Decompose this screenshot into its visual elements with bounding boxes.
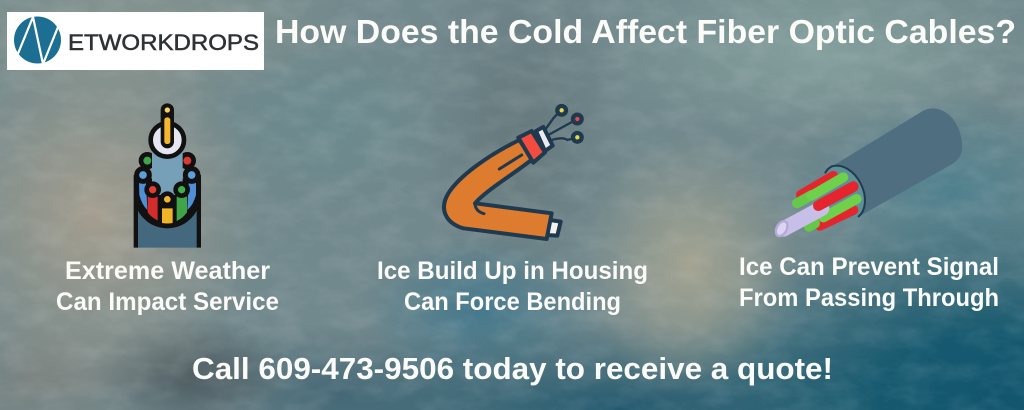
logo wordmark: ETWORKDROPS bbox=[68, 30, 259, 55]
label: extreme weather: Extreme Weather bbox=[65, 257, 270, 285]
icon: bent orange cable bbox=[444, 106, 582, 239]
label: extreme weather: Can Impact Service bbox=[56, 288, 279, 316]
title: How Does the Cold Affect Fiber Optic Cables? bbox=[275, 13, 1016, 50]
label: ice prevents signal: From Passing Through bbox=[739, 284, 999, 312]
call to action: Call 609-473-9506 today to receive a quote! bbox=[192, 351, 833, 386]
icon: open cable with fibers bbox=[773, 108, 962, 238]
logo mark bbox=[14, 16, 61, 64]
label: ice build up: Can Force Bending bbox=[404, 288, 621, 316]
label: ice build up bbox=[377, 257, 648, 316]
label: extreme weather bbox=[56, 257, 279, 316]
label: ice prevents signal: Ice Can Prevent Signal bbox=[739, 253, 999, 281]
logo: Networkdrops bbox=[7, 12, 264, 70]
label: ice build up: Ice Build Up in Housing bbox=[377, 257, 648, 285]
label: ice prevents signal bbox=[739, 253, 999, 312]
icon: cable cross-section bbox=[134, 103, 201, 248]
